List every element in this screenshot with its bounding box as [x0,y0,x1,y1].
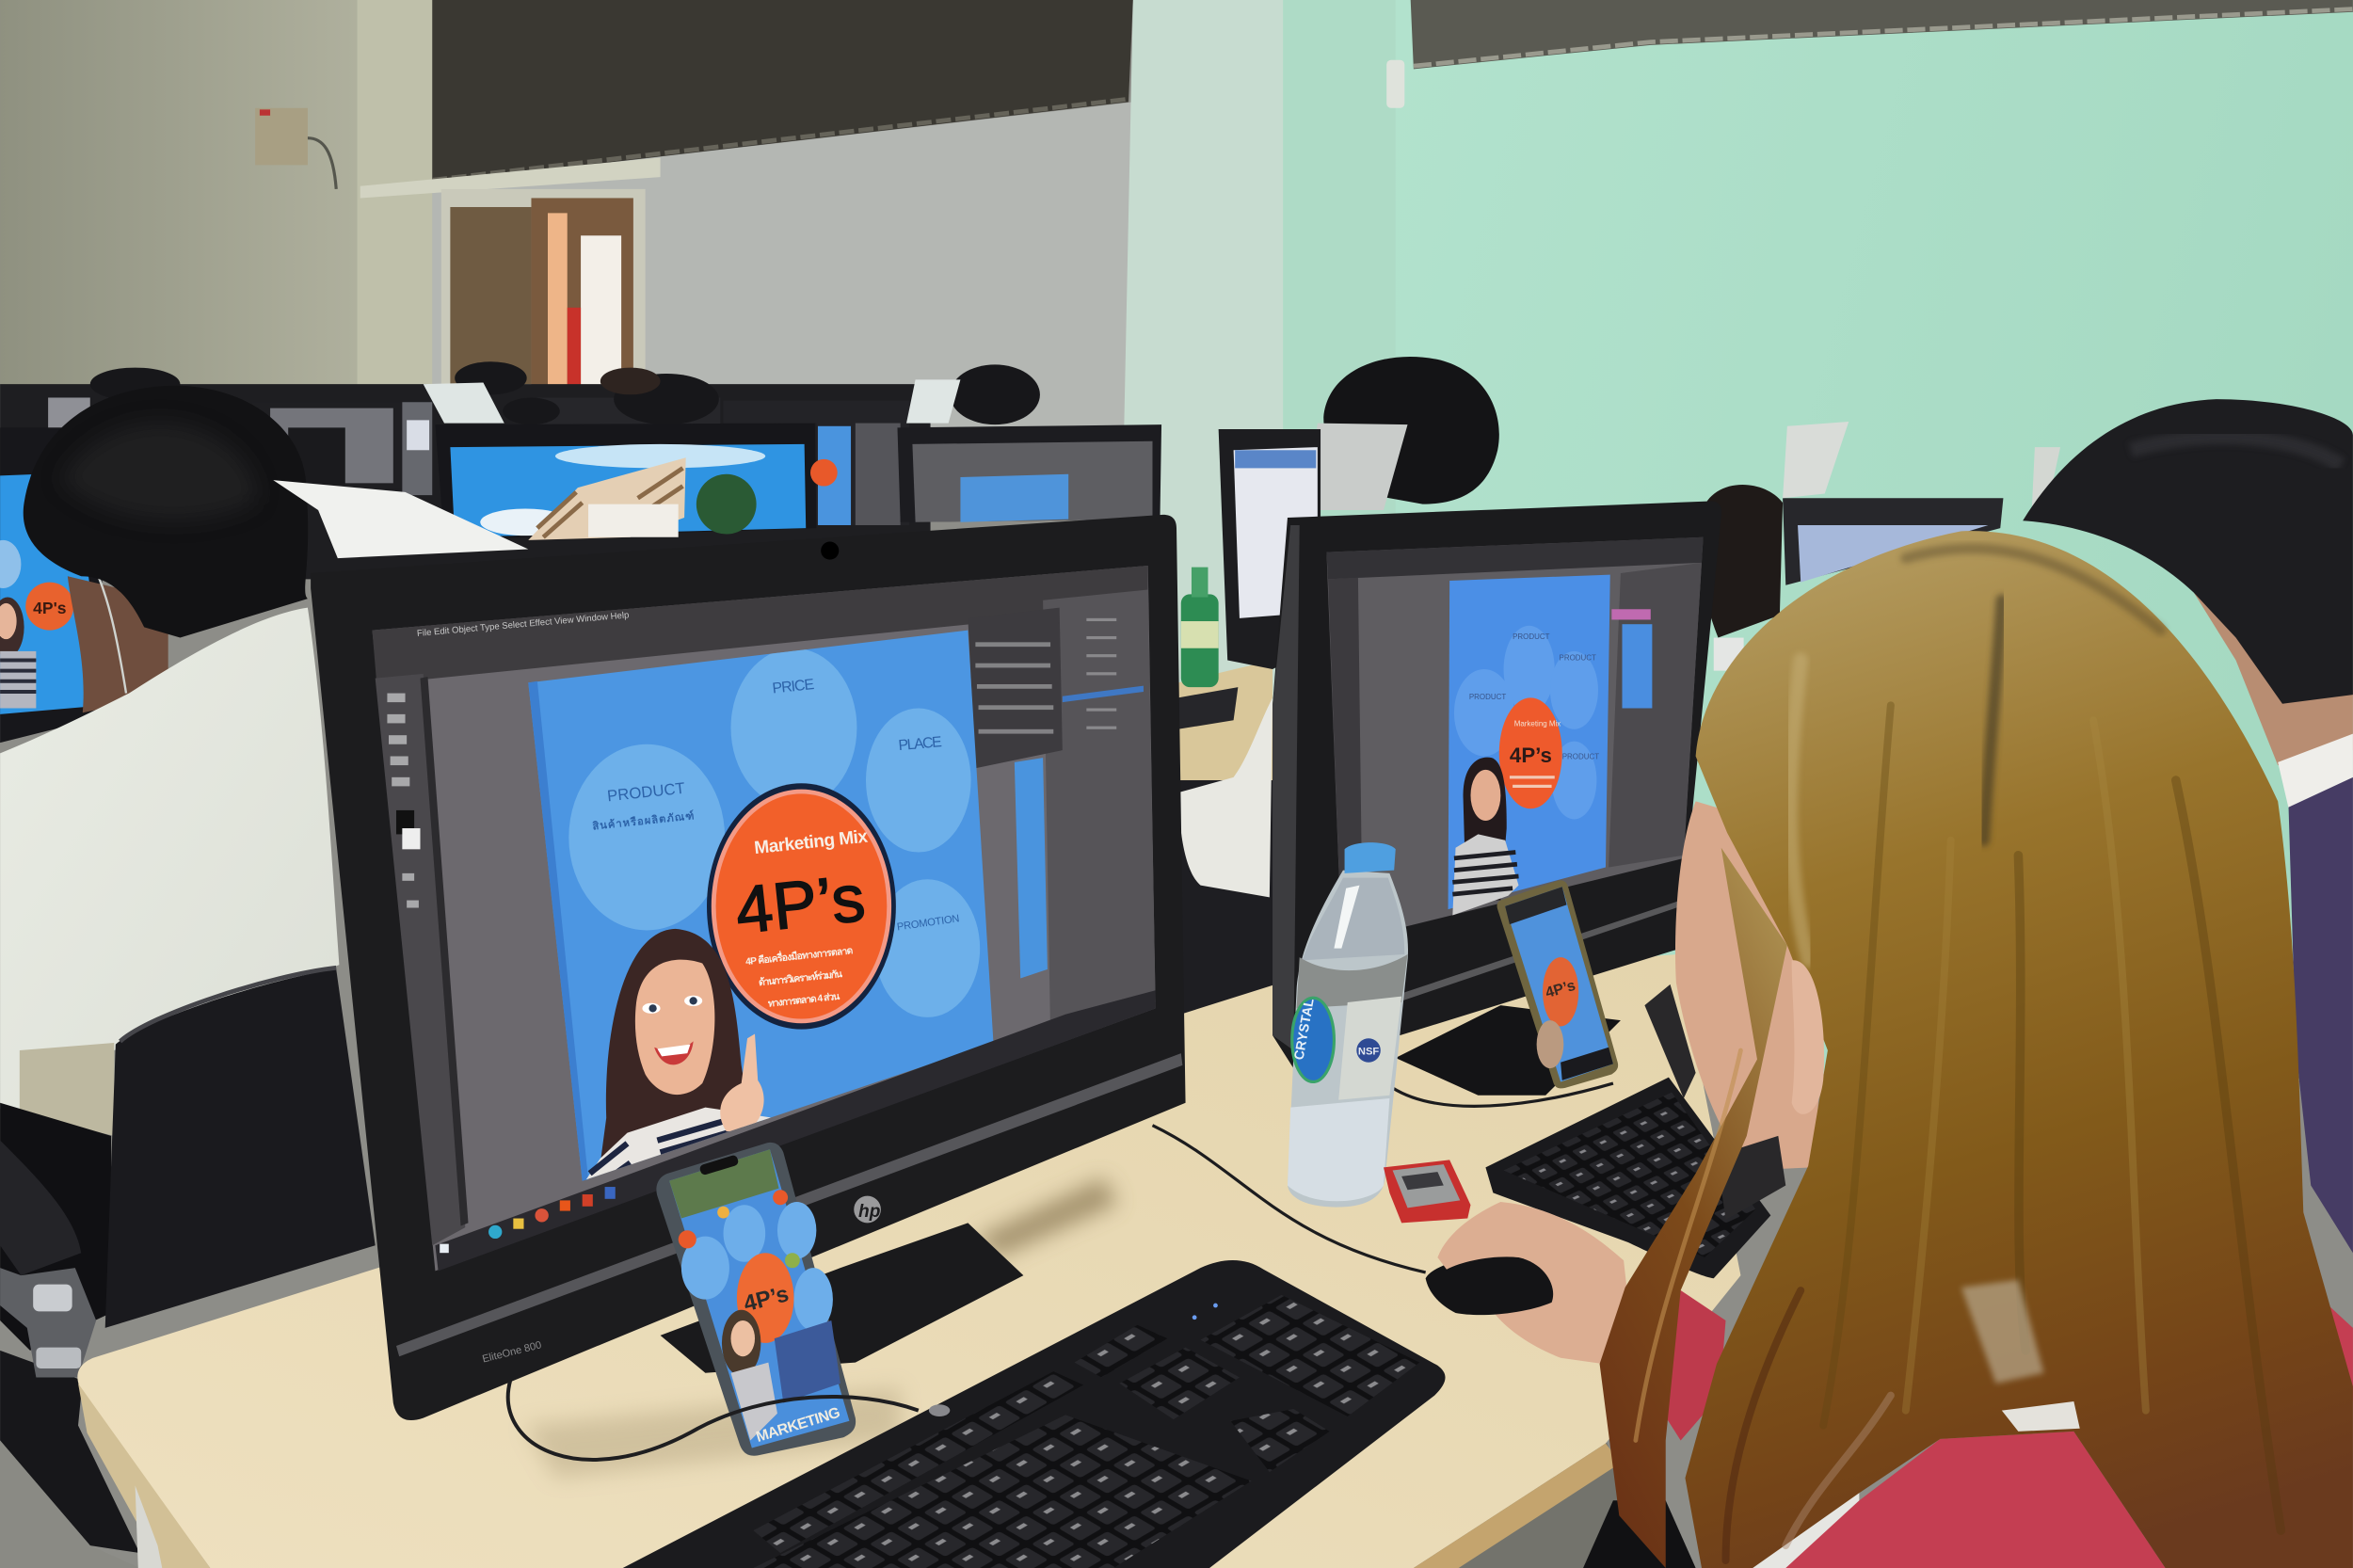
main cable [508,1381,919,1460]
side vents [1273,525,1300,1050]
bottle cap [1345,842,1396,873]
PLACE bubble: PLACE [898,734,942,754]
PRODUCT bubble: PRODUCT [606,779,686,805]
paper on back monitors [424,379,960,424]
hair highlight [2131,437,2341,465]
MARKETING banner: MARKETING [754,1405,842,1446]
product labels [1469,632,1599,761]
monitor rear [724,401,909,525]
floor under desk right [1411,1440,1666,1568]
wall box sensor [255,108,336,189]
second chin highlight [1343,901,1681,1020]
central pillar [1118,0,1411,720]
phone 2 [1497,880,1618,1088]
main monitor [311,515,1186,1420]
main desk [77,954,1740,1568]
arrow keys [1230,1409,1330,1472]
bottle water shade [1297,954,1408,1008]
thumbnail artboard [1015,758,1048,978]
bottle label [1292,997,1401,1100]
phone top strip [669,1149,779,1219]
desk front edge left [78,1384,210,1568]
woman ear [1792,960,1824,1114]
bottle highlight [1334,886,1359,949]
second monitor [1273,501,1721,1068]
mini orange badge [679,1190,800,1343]
PRODUCT bubble [568,744,725,930]
cable second monitor [1152,1126,1426,1272]
middle wall [432,102,1133,450]
door [441,189,646,391]
artboard [528,631,994,1181]
red sweater arm [1625,1288,1725,1440]
tools column [387,694,420,908]
woman hair [1600,531,2353,1568]
far left blue monitor [0,427,105,743]
far left monitors [48,397,90,427]
right curtain [1411,0,2353,69]
right wall [1396,0,2353,1080]
right panel [1043,590,1156,1035]
mouse [1426,1256,1553,1315]
floor [0,1440,139,1568]
product labels: PRODUCT [1513,632,1550,641]
front lock [1600,848,1787,1568]
man left: earphone cable [90,558,126,694]
person behind monitor [1305,357,1499,510]
screen [372,566,1156,1271]
phone mini bubbles [681,1202,833,1331]
orange 4P badge: 4P’s [732,861,868,948]
second monitor stand [1396,1005,1621,1096]
illustrator top bar [372,566,1148,684]
function row [753,1371,1083,1553]
man left: white shirt [0,608,339,1134]
nav block [1119,1348,1240,1419]
dark back of room band [0,384,931,579]
collar [2278,734,2353,808]
product labels: PRODUCT [1560,653,1596,662]
fingers on mouse [1437,1232,1561,1270]
back row heads [90,361,1040,424]
bezel [311,515,1186,1420]
dark area under back desk [1178,780,1283,1020]
white collar band [2002,1401,2080,1432]
alpha keys [753,1415,1252,1568]
second artboard [1449,575,1610,909]
product bubbles [1504,626,1555,712]
main hair mass [1685,531,2353,1568]
water bottle [1288,842,1408,1208]
left wall [0,0,368,397]
phone screen [669,1149,849,1448]
PROMOTION bubble [875,879,980,1017]
left dark curtain [432,0,1133,183]
PROMOTION bubble: PROMOTION [896,913,960,933]
second badge: Marketing Mix [1514,720,1561,728]
second badge: 4P’s [1510,744,1552,767]
layer highlight [1063,686,1144,702]
far left blue monitor: 4P's [33,599,67,617]
elite label: EliteOne 800 [481,1339,543,1365]
white sleeve person behind [1179,697,1273,897]
pale collar through hair [1961,1280,2043,1384]
white paper behind man [273,480,528,558]
desk front edge right [1414,1444,1621,1568]
hand on mouse [1437,1202,1636,1368]
monitor with campus picture [435,424,816,540]
back desk and bottle [1178,429,1321,788]
right man [2023,399,2353,1253]
bottle upper lighter [1303,878,1404,960]
man left dark trousers [0,1103,111,1351]
orange 4P badge: ด้านการวิเคราะห์ร่วมกัน [758,968,843,988]
tiny woman [0,598,36,708]
print keys [1075,1325,1167,1378]
notch [699,1155,739,1176]
right rear person and monitor [1698,422,2060,671]
toolbar [376,674,465,1245]
wall fire alarm [1386,60,1404,108]
main monitor stand [661,1223,1023,1373]
desk leg [136,1485,162,1568]
PRICE bubble [731,648,856,808]
man left seat beige [20,1043,114,1136]
back row monitors [48,397,1161,540]
chrome bracket [0,1268,96,1378]
hp logo: hp [858,1202,881,1222]
bottle lower [1288,1098,1389,1201]
keyboard hp badge [929,1404,950,1416]
chin highlight [396,1053,1182,1356]
second badge [1499,697,1562,808]
second keyboard [1485,1078,1770,1278]
swatches [1611,609,1651,619]
woman portrait on screen [583,929,773,1185]
dark legs under desk [1583,1500,1696,1568]
menu text: File Edit Object Type Select Effect View Window Help [417,610,630,639]
mini text block [775,1320,840,1403]
bottle label: CRYSTAL [1292,998,1318,1062]
second woman [1452,758,1518,915]
sweater [2288,777,2353,1253]
phone 2: 4P’s [1544,978,1577,1001]
status leds [1193,1304,1218,1320]
mini woman [722,1310,777,1440]
chair seat edge highlight [120,968,336,1041]
woman red sweater and collar [1753,1272,2353,1568]
phone leaning on main monitor [656,1143,856,1456]
numpad [1201,1295,1419,1416]
orange 4P badge: 4P คือเครื่องมือทางการตลาด [744,943,854,968]
ceiling beam [360,157,661,198]
ruler strip [420,677,469,1226]
office chair [0,968,376,1553]
artboard edge [528,681,588,1181]
main keyboard [623,1260,1446,1568]
black mask [1644,984,1785,1220]
PRODUCT bubble: สินค้าหรือผลิตภัณฑ์ [591,808,695,833]
taskbar icons [440,1187,616,1253]
chair body [0,1351,139,1553]
bottle body [1288,871,1408,1208]
product labels: PRODUCT [1469,693,1506,701]
clouds [555,444,765,468]
cable behind keyboard [1393,1083,1613,1106]
orange 4P badge: ทางการตลาด 4 ส่วน [767,991,841,1010]
tree [696,474,757,535]
PLACE bubble [866,708,971,853]
hair strands [1636,549,2281,1560]
product labels: PRODUCT [1562,753,1599,761]
mini orange badge: 4P’s [741,1281,792,1317]
webcam [821,542,839,560]
monitor blue artboard [897,424,1161,522]
hair [2023,399,2353,704]
left pillar [358,0,440,397]
man left: hair [24,386,308,638]
hp logo [854,1196,881,1223]
taskbar [435,990,1156,1271]
armrest pad [0,1141,81,1275]
main monitor shadow on desk [525,1177,1118,1478]
orange 4P badge [707,783,896,1030]
side panels [1609,563,1702,867]
properties panel [968,608,1063,768]
building [528,457,686,540]
PRICE bubble: PRICE [772,677,815,697]
man left: neck [68,576,168,712]
neck [2194,593,2353,765]
red calculator item [1384,1160,1470,1223]
woman face [1675,801,1831,1171]
orange 4P badge: Marketing Mix [753,827,869,858]
second screen [1326,537,1704,942]
bottle label: NSF [1358,1047,1379,1058]
